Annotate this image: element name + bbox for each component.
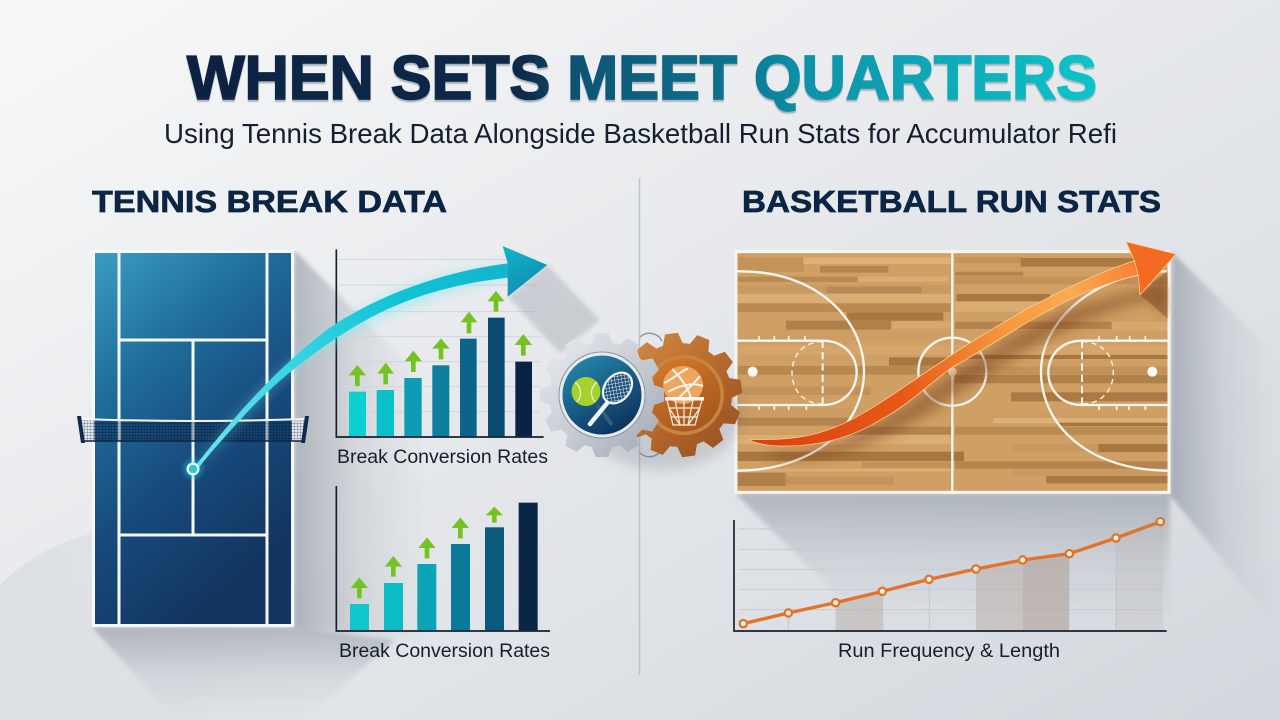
bar chart: break conversion rates bottom: [336, 486, 550, 631]
data points: [740, 518, 1164, 627]
line chart: run frequency and length: [734, 518, 1167, 631]
label: run frequency and length: Run Frequency & Length: [838, 641, 1060, 662]
heading: basketball run stats: BASKETBALL RUN STATS: [742, 184, 1161, 219]
growth arrows: [349, 291, 532, 386]
tennis court: [77, 251, 309, 626]
label: break conversion rates bottom: Break Conversion Rates: [339, 641, 550, 662]
title: WHEN SETS MEET QUARTERS: [187, 44, 1097, 113]
heading: tennis break data: TENNIS BREAK DATA: [92, 184, 447, 219]
growth arrows: [351, 507, 503, 598]
gears: tennis and basketball: [540, 332, 745, 473]
gear: basketball: [636, 332, 742, 458]
wood planks: [737, 257, 1168, 486]
icon: basketball and hoop: [663, 366, 704, 425]
basketball court: [735, 251, 1170, 493]
arrow: basketball run trend: [749, 242, 1176, 460]
arrow origin marker: [183, 459, 203, 479]
bar chart: break conversion rates top: [336, 249, 544, 437]
label: break conversion rates top: Break Conversion Rates: [337, 447, 548, 468]
tennis net: [77, 416, 309, 443]
gear: tennis: [540, 333, 664, 457]
icon: tennis ball and racket: [572, 367, 638, 425]
subtitle: Using Tennis Break Data Alongside Basketball Run Stats for Accumulator Refi: [164, 118, 1117, 149]
arrow: tennis break trend: [183, 246, 600, 479]
court markings: [736, 252, 1169, 492]
